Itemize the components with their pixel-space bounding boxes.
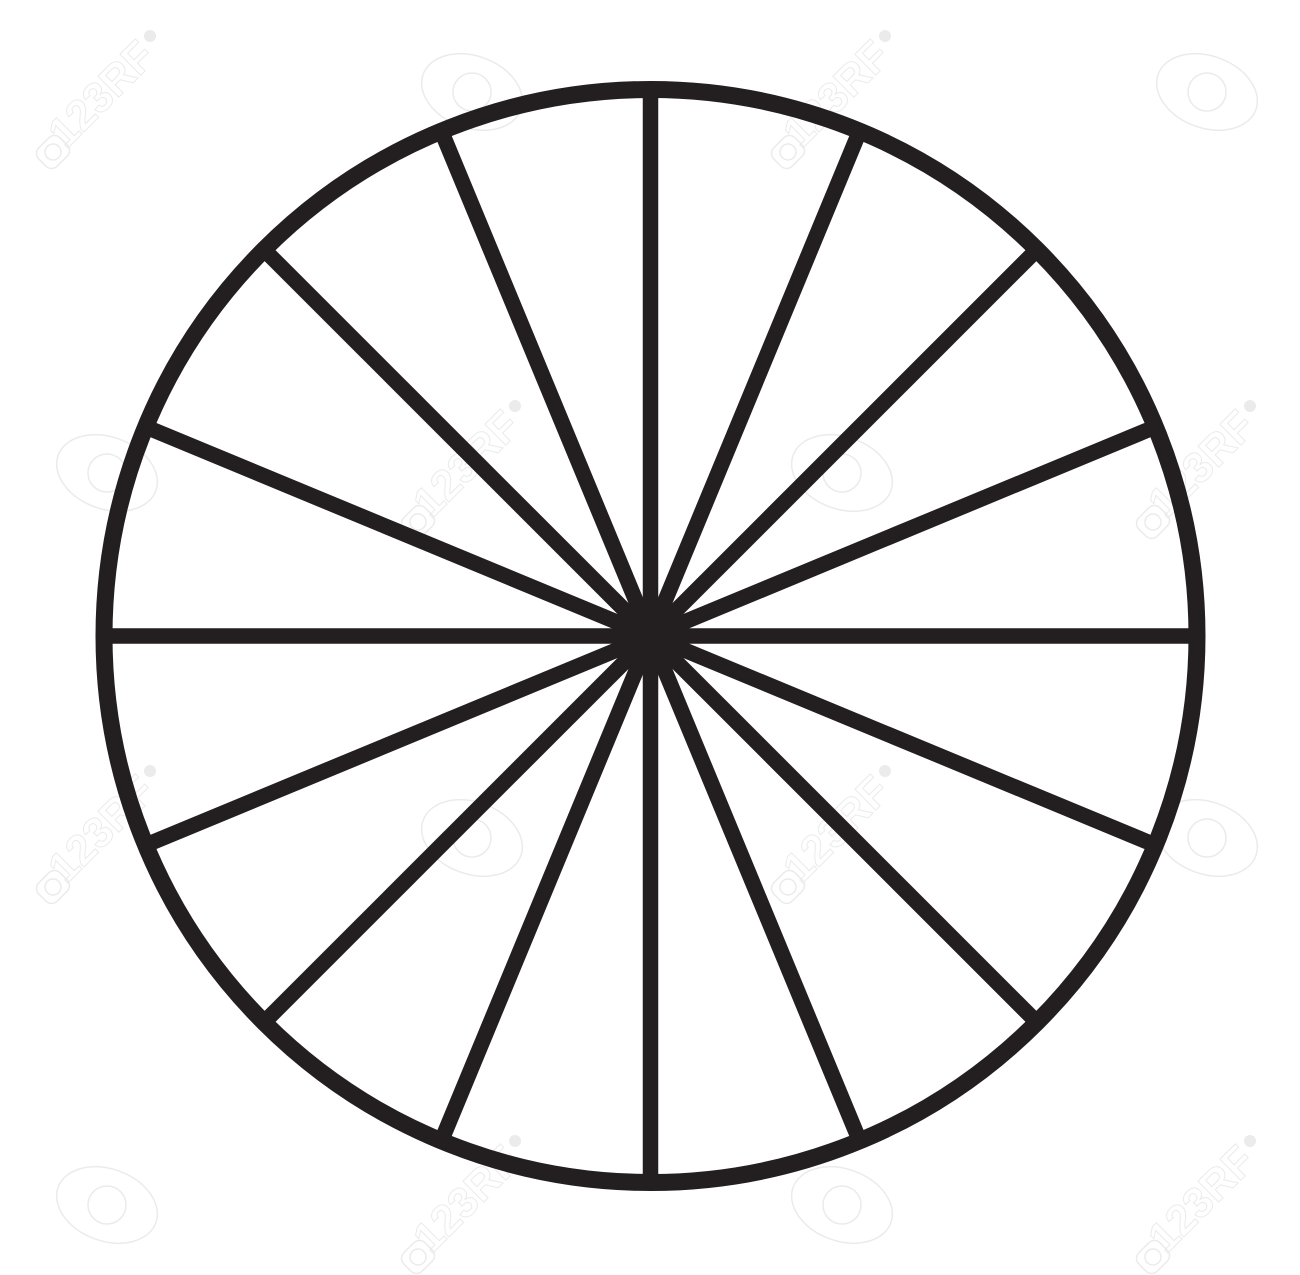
wheel diagram: circle with 16 segments bbox=[104, 90, 1197, 1182]
watermark: 123RF top centre right: 123RF bbox=[774, 32, 899, 157]
watermark: egg icon row 3 col 2 bbox=[411, 786, 533, 890]
watermark: egg icon row 2 col 1 bbox=[46, 421, 168, 525]
watermark: egg icon row 3 col 4 bbox=[1146, 786, 1268, 890]
spokes bbox=[104, 90, 1196, 1182]
watermark: egg icon row 4 col 3 bbox=[781, 1153, 903, 1257]
watermark: 123RF third row left: 123RF bbox=[39, 767, 164, 892]
outer ring bbox=[104, 90, 1197, 1182]
watermark: egg icon row 1 col 4 bbox=[1146, 40, 1268, 144]
watermark: 123RF top left: 123RF bbox=[39, 32, 164, 157]
watermark: 123RF second row right: 123RF bbox=[1139, 402, 1264, 527]
watermark: egg icon row 1 col 2 bbox=[411, 40, 533, 144]
watermark: 123RF second row left: 123RF bbox=[404, 402, 529, 527]
watermark: 123RF bottom left: 123RF bbox=[404, 1137, 529, 1262]
watermark: egg icon row 2 col 3 bbox=[781, 421, 903, 525]
watermark: egg icon row 4 col 1 bbox=[46, 1153, 168, 1257]
watermark: 123RF third row right: 123RF bbox=[774, 767, 899, 892]
watermark: 123RF bottom right: 123RF bbox=[1139, 1137, 1264, 1262]
